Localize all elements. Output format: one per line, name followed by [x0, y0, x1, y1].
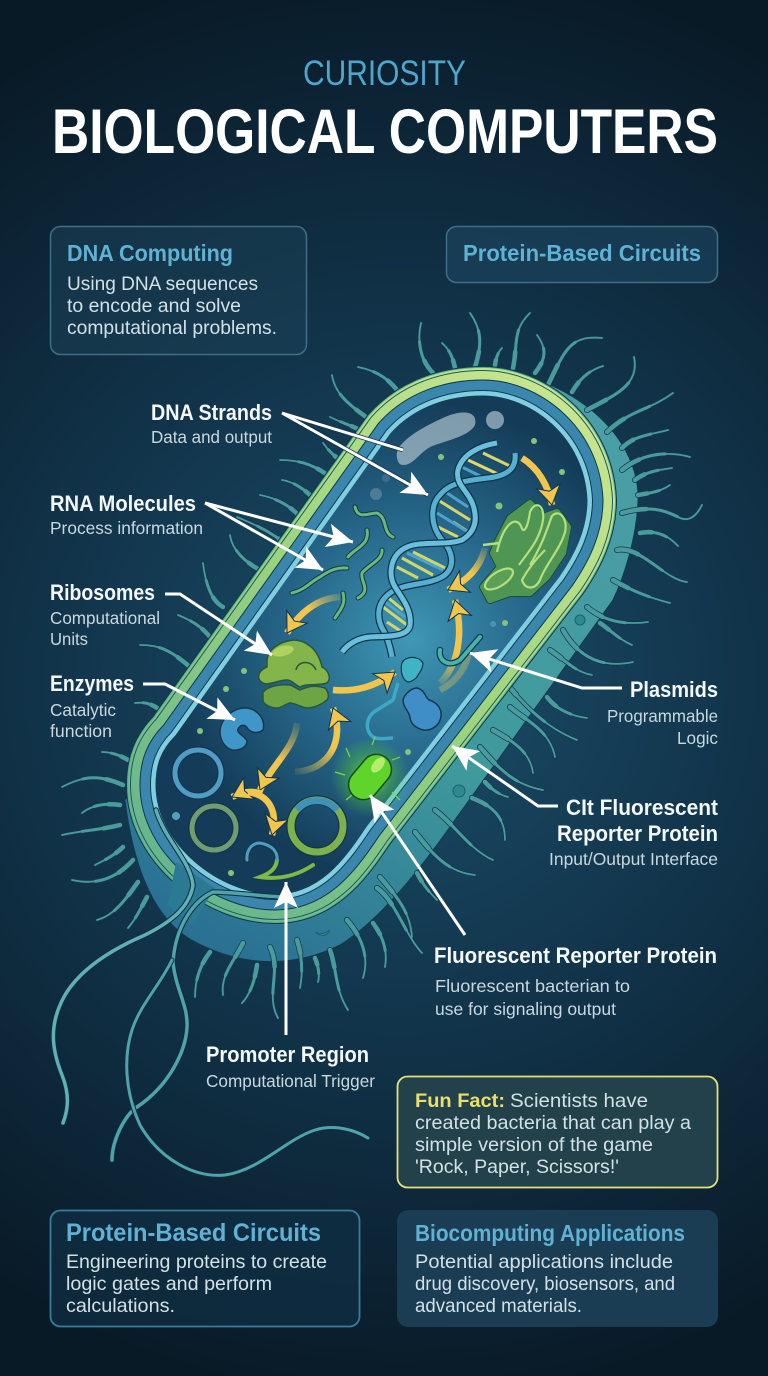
label: Ribosomes [50, 580, 160, 649]
panel: Protein-Based Circuits bottom: Engineering proteins to create [66, 1251, 327, 1273]
cell wall bands [155, 395, 588, 895]
DNA rungs [383, 453, 512, 632]
label: Fluorescent Reporter Protein: use for signaling output [435, 999, 616, 1019]
label: RNA Molecules: RNA Molecules [50, 491, 196, 516]
panel: DNA Computing: computational problems. [67, 317, 277, 339]
label: Enzymes: Enzymes [50, 671, 134, 696]
panel: Protein-Based Circuits top [446, 226, 718, 282]
panel: Protein-Based Circuits top: Protein-Based Circuits [463, 240, 701, 266]
callout: Fun Fact: Fun Fact: [415, 1090, 505, 1112]
ring blue [175, 750, 221, 796]
enzyme small teal [367, 657, 423, 739]
arrow: DNA Strands [282, 413, 428, 495]
arrow: RNA Molecules [205, 503, 353, 570]
panel: Protein-Based Circuits bottom: calculations. [66, 1295, 175, 1317]
label: CIt Fluorescent Reporter Protein: CIt Fluorescent [566, 795, 719, 820]
title [52, 54, 718, 167]
plasmid fragment [440, 637, 480, 663]
hairs around the cell [62, 313, 702, 1018]
label: Ribosomes: Ribosomes [50, 580, 155, 605]
flagellum two [112, 892, 290, 1160]
arrow: CIt Fluorescent [452, 746, 558, 806]
callout: Fun Fact: Scientists have [510, 1090, 648, 1112]
label: RNA Molecules [50, 491, 203, 538]
panel: DNA Computing: Using DNA sequences [67, 273, 258, 295]
ring green [192, 806, 236, 850]
label: Plasmids: Programmable [607, 706, 718, 726]
label: Fluorescent Reporter Protein [434, 943, 717, 1019]
small vesicles [172, 438, 565, 876]
label: Fluorescent Reporter Protein: Fluorescent bacterian to [435, 976, 630, 996]
label: Enzymes [50, 671, 134, 741]
label: Promoter Region: Computational Trigger [206, 1071, 375, 1091]
callout: Fun Fact [398, 1076, 718, 1188]
label: CIt Fluorescent Reporter Protein: Input/Output Interface [549, 849, 718, 869]
title: CURIOSITY [303, 54, 466, 93]
callout: Fun Fact: 'Rock, Paper, Scissors!' [415, 1156, 619, 1178]
label: CIt Fluorescent Reporter Protein: Reporter Protein [557, 821, 718, 846]
arrow: Enzymes [143, 684, 235, 720]
label: Promoter Region [206, 1042, 375, 1091]
panel: Protein-Based Circuits bottom: logic gates and perform [66, 1273, 272, 1295]
flagellum three [127, 960, 368, 1175]
membrane highlight [370, 411, 504, 500]
enzyme left [220, 708, 264, 750]
fluorescent reporter protein cell [330, 737, 410, 817]
label: Plasmids: Plasmids [630, 677, 718, 702]
panel: Protein-Based Circuits bottom: Protein-Based Circuits [66, 1219, 321, 1247]
label: RNA Molecules: Process information [50, 518, 203, 538]
cell underside shell [125, 368, 638, 962]
label: DNA Strands: DNA Strands [151, 400, 272, 425]
panel: DNA Computing: DNA Computing [67, 240, 233, 266]
ribosome [259, 640, 329, 708]
flagellum one [53, 810, 193, 1123]
yellow flow arrows [232, 458, 552, 835]
DNA double helix [342, 443, 515, 657]
enzyme right [403, 688, 441, 730]
panel: Biocomputing Applications: advanced materials. [415, 1295, 582, 1317]
panel: Biocomputing Applications: Biocomputing Applications [415, 1220, 685, 1246]
plasmid rings [175, 750, 343, 878]
label: Plasmids: Logic [677, 728, 718, 748]
bacterium wall and interior [155, 395, 588, 895]
arrow: Promoter Region [284, 882, 288, 1035]
RNA molecules [292, 507, 393, 618]
label: Promoter Region: Promoter Region [206, 1042, 369, 1067]
shell bubbles [315, 615, 585, 936]
wall gap at flagella [168, 862, 215, 925]
panel: Biocomputing Applications: drug discovery, biosensors, and [415, 1273, 675, 1295]
panel: Biocomputing Applications: Potential applications include [415, 1251, 673, 1273]
callout: Fun Fact: created bacteria that can play a [415, 1112, 691, 1134]
helix strand front [342, 443, 497, 652]
arrow: Fluorescent Reporter Protein [370, 795, 465, 935]
panel: DNA Computing [50, 226, 306, 354]
callout: Fun Fact: simple version of the game [415, 1134, 653, 1156]
label: DNA Strands: Data and output [151, 427, 272, 447]
panel: Biocomputing Applications [397, 1210, 718, 1327]
helix strand back [379, 453, 515, 657]
cell interior [155, 395, 588, 895]
label: Plasmids [607, 677, 718, 748]
arrow: Plasmids [470, 653, 622, 688]
promoter loop [247, 843, 313, 878]
organelle: green folded structure [482, 503, 568, 600]
panel: DNA Computing: to encode and solve [67, 295, 241, 317]
label: DNA Strands [151, 400, 272, 447]
panel: Protein-Based Circuits bottom [50, 1210, 360, 1326]
label: Enzymes: Catalytic [50, 700, 116, 720]
flagella tails [53, 810, 368, 1175]
label: Ribosomes: Units [50, 629, 88, 649]
ring large [291, 800, 343, 852]
label: Enzymes: function [50, 721, 112, 741]
label: CIt Fluorescent Reporter Protein [549, 795, 719, 869]
label: Fluorescent Reporter Protein: Fluorescent Reporter Protein [434, 943, 717, 968]
label: Ribosomes: Computational [50, 608, 160, 628]
arrow: Ribosomes [165, 594, 272, 655]
